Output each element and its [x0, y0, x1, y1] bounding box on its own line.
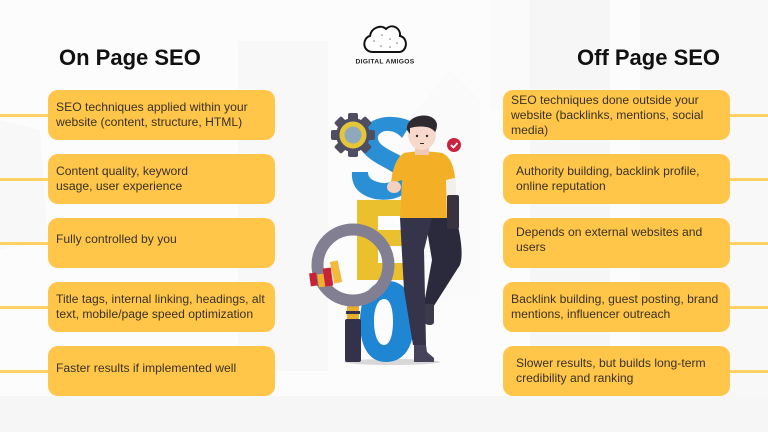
- magnifier handle: [345, 319, 361, 362]
- card: off page focus: [503, 154, 730, 204]
- card: off page definition: SEO techniques done outside your: [511, 92, 699, 106]
- card: off page definition: media): [511, 123, 548, 137]
- card: off page control: [503, 218, 730, 268]
- heading: Off Page SEO: Off Page SEO: [577, 45, 720, 70]
- hair: [407, 115, 437, 134]
- card: on page focus: [48, 154, 275, 204]
- card: on page tactics: [48, 282, 275, 332]
- shirt: [391, 152, 455, 218]
- card: on page definition: [48, 90, 275, 140]
- connector lines: left: [0, 114, 48, 373]
- card: off page results: credibility and ranking: [516, 371, 633, 385]
- card: on page definition: SEO techniques applied within your: [56, 100, 248, 114]
- card: off page control: Depends on external websites and: [516, 225, 702, 239]
- back shoe: [424, 304, 434, 325]
- hand: [387, 181, 401, 193]
- card: on page focus: Content quality, keyword: [56, 164, 188, 178]
- card: on page tactics: Title tags, internal linking, headings, alt: [56, 292, 265, 306]
- gear: [331, 113, 375, 157]
- card: off page focus: online reputation: [516, 179, 606, 193]
- check badge: [447, 138, 461, 152]
- card: off page results: Slower results, but builds long-term: [516, 356, 706, 370]
- card: on page control: Fully controlled by you: [56, 232, 177, 246]
- letter S: [352, 117, 413, 200]
- front shoe: [414, 345, 434, 362]
- card: on page results: Faster results if implemented well: [56, 361, 236, 375]
- logo: Digital Amigos: [355, 25, 415, 66]
- ground shadow: [344, 359, 440, 365]
- card: on page tactics: text, mobile/page speed optimization: [56, 307, 253, 321]
- card: on page results: [48, 346, 275, 396]
- logo: Digital Amigos: DIGITAL AMIGOS: [355, 58, 415, 66]
- card: off page control: users: [516, 240, 546, 254]
- card: on page focus: usage, user experience: [56, 179, 182, 193]
- folder: [447, 195, 459, 229]
- card: off page definition: website (backlinks, mentions, social: [511, 108, 703, 122]
- card: off page definition: [503, 90, 730, 140]
- letter O: [360, 281, 414, 362]
- card: off page results: [503, 346, 730, 396]
- face: [416, 135, 428, 144]
- card: off page focus: Authority building, backlink profile,: [516, 164, 700, 178]
- letter E: [357, 200, 410, 280]
- heading: On Page SEO: On Page SEO: [59, 45, 201, 70]
- connector lines: right: [730, 114, 768, 373]
- back leg: [424, 218, 462, 312]
- card: on page definition: website (content, structure, HTML): [56, 115, 242, 129]
- card: off page tactics: Backlink building, guest posting, brand: [511, 292, 718, 306]
- chart bars in magnifier: [309, 260, 342, 287]
- card: off page tactics: [503, 282, 730, 332]
- arm sleeve: [446, 172, 456, 198]
- neck: [415, 146, 429, 155]
- head: [408, 118, 436, 150]
- card: off page tactics: mentions, influencer outreach: [511, 307, 670, 321]
- front leg: [400, 218, 432, 345]
- illustration: person leaning on SEO letters: [309, 113, 462, 365]
- magnifier ring: [318, 230, 388, 300]
- card: on page control: [48, 218, 275, 268]
